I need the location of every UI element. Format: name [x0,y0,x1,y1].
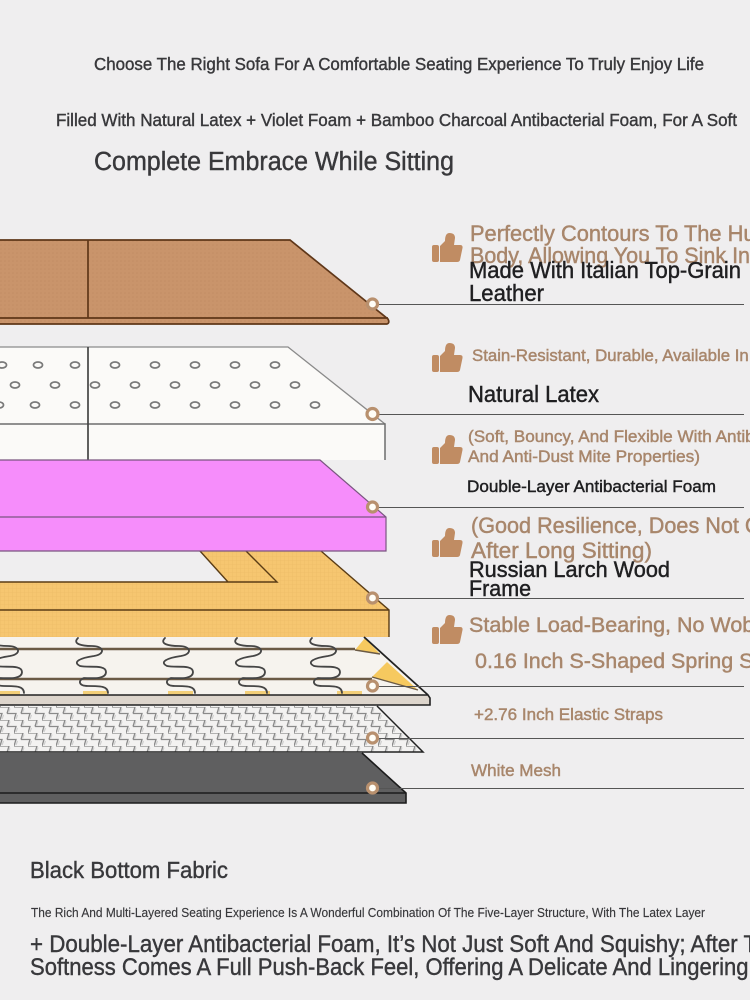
marker dots [367,299,378,793]
leader lines [378,304,744,788]
layer name: Frame [469,576,531,601]
callout: wood frame [432,513,750,601]
icon: thumbs up [432,528,463,557]
bottom heading: Black Bottom Fabric [30,857,228,883]
layer name: Made With Italian Top-Grain [469,257,741,283]
benefit text: Body, Allowing You To Sink In [470,243,750,268]
label: elastic straps: +2.76 Inch Elastic Straps [474,705,663,724]
callout: springs [432,613,750,673]
title line: Choose The Right Sofa For A Comfortable Seating Experience To Truly Enjoy Life [94,54,704,74]
layer: antibacterial foam [0,460,386,551]
callout: leather [432,221,750,306]
icon: thumbs up [432,343,463,372]
layer: black bottom fabric [0,753,406,803]
layer name [469,557,670,601]
label: white mesh: White Mesh [471,761,561,780]
layer name [469,257,741,306]
layer name: Russian Larch Wood [469,557,670,582]
callout: latex [432,343,750,407]
benefit text [471,513,750,563]
subtitle line: Filled With Natural Latex + Violet Foam + Bamboo Charcoal Antibacterial Foam, For A Soft [56,110,737,130]
bottom description [30,931,750,981]
icon: thumbs up [432,233,463,262]
layer name: Leather [469,280,544,306]
benefit text: After Long Sitting) [471,538,652,563]
layer: spring support [0,637,430,705]
benefit text [470,221,750,268]
benefit text: And Anti-Dust Mite Properties) [468,448,700,466]
layer name: Double-Layer Antibacterial Foam [467,477,716,496]
bottom small text: The Rich And Multi-Layered Seating Experience Is A Wonderful Combination Of The Five-Layer Structure, With The Latex Layer [31,905,706,920]
layer: elastic straps mesh [0,706,423,752]
layer: wood frame [0,551,389,637]
heading: Complete Embrace While Sitting [94,148,454,176]
benefit text [468,428,750,466]
icon: thumbs up [432,615,463,644]
icon: thumbs up [432,435,463,464]
layer name: Natural Latex [468,381,599,407]
layer: natural latex [0,347,385,460]
layer: leather [0,240,389,324]
callout: foam [432,428,750,496]
